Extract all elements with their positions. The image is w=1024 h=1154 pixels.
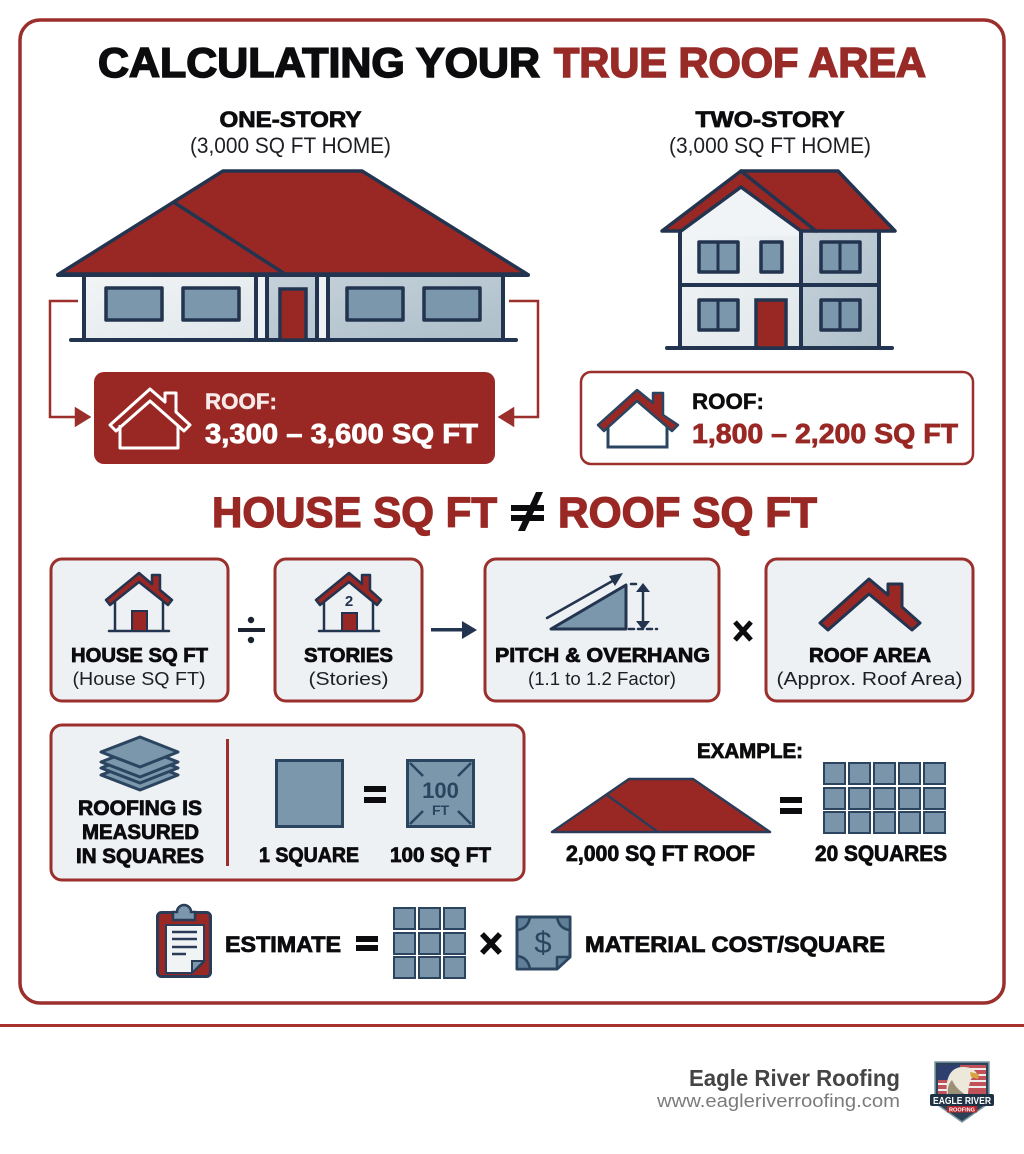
callout: one-story roof area: 3,300 – 3,600 SQ FT bbox=[205, 418, 478, 449]
panel: measured in squares bbox=[51, 725, 524, 880]
title bbox=[98, 39, 926, 86]
one-story heading: (3,000 SQ FT HOME) bbox=[190, 133, 391, 158]
icon: roof bbox=[820, 579, 920, 630]
panel: measured in squares: 1 SQUARE bbox=[259, 844, 359, 867]
title: CALCULATING YOUR bbox=[98, 39, 540, 86]
icon: two-story house: 2 bbox=[345, 593, 353, 610]
callout: two-story roof area: 1,800 – 2,200 SQ FT bbox=[692, 418, 958, 449]
one-story house illustration bbox=[58, 171, 528, 340]
panel: two-story bbox=[581, 107, 973, 464]
icon: clipboard bbox=[158, 905, 210, 976]
panel: example: EXAMPLE: bbox=[697, 740, 803, 763]
roofing is measured text: MEASURED bbox=[82, 821, 199, 844]
panel: example: 2,000 SQ FT ROOF bbox=[566, 841, 755, 866]
icon: example roof bbox=[552, 779, 770, 832]
footer rule bbox=[0, 1024, 1024, 1027]
two-story house illustration bbox=[662, 171, 895, 348]
panel: estimate formula bbox=[158, 905, 885, 978]
panel: roof area: (Approx. Roof Area) bbox=[776, 669, 962, 689]
operator: multiply bbox=[735, 622, 751, 640]
operator: divide bbox=[238, 617, 265, 643]
panel: estimate formula: ESTIMATE bbox=[225, 932, 341, 957]
icon: pitch triangle bbox=[547, 573, 657, 630]
icon: 100 ft square bbox=[408, 760, 474, 826]
panel: stories bbox=[275, 559, 422, 701]
callout: one-story roof area: ROOF: bbox=[205, 389, 277, 414]
panel: pitch and overhang: PITCH & OVERHANG bbox=[495, 645, 710, 667]
arrow: to pitch bbox=[431, 621, 477, 639]
heading: house sq ft not equal roof sq ft bbox=[212, 489, 817, 537]
panel: estimate formula: MATERIAL COST/SQUARE bbox=[585, 932, 885, 957]
grid: nine squares bbox=[394, 908, 465, 978]
footer: brand name and url: www.eagleriverroofing.com bbox=[656, 1090, 900, 1111]
one-story heading: ONE-STORY bbox=[220, 107, 362, 132]
panel: stories: (Stories) bbox=[308, 669, 388, 689]
callout: two-story roof area: ROOF: bbox=[692, 389, 764, 414]
footer: brand name and url bbox=[656, 1065, 900, 1111]
icon: one square bbox=[276, 760, 342, 826]
equals bbox=[364, 786, 386, 803]
icon: stacked shingles bbox=[101, 737, 178, 790]
panel: one-story bbox=[50, 107, 538, 464]
grid: twenty squares bbox=[824, 763, 945, 833]
title: TRUE ROOF AREA bbox=[554, 39, 926, 86]
panel: house sq ft: (House SQ FT) bbox=[72, 669, 206, 689]
two-story heading: (3,000 SQ FT HOME) bbox=[669, 133, 871, 158]
panel: house sq ft: HOUSE SQ FT bbox=[71, 645, 208, 667]
roofing is measured text: IN SQUARES bbox=[76, 845, 204, 868]
panel: example bbox=[552, 740, 947, 866]
panel: pitch and overhang: (1.1 to 1.2 Factor) bbox=[528, 669, 676, 689]
panel: measured in squares: 100 SQ FT bbox=[390, 844, 491, 867]
footer: logo badge: EAGLE RIVER bbox=[933, 1095, 991, 1107]
icon: two-story house bbox=[316, 573, 381, 631]
callout: one-story roof area bbox=[94, 372, 495, 464]
panel: roof area bbox=[766, 559, 973, 701]
icon: dollar note bbox=[517, 917, 570, 969]
two-story heading bbox=[669, 107, 871, 158]
two-story heading: TWO-STORY bbox=[696, 107, 845, 132]
icon: white house outline bbox=[110, 389, 190, 448]
equals bbox=[356, 936, 378, 951]
heading: house sq ft not equal roof sq ft: HOUSE SQ FT bbox=[212, 489, 497, 537]
icon: 100 ft square: FT bbox=[432, 802, 449, 818]
heading: house sq ft not equal roof sq ft: ROOF SQ FT bbox=[558, 489, 817, 537]
footer: brand name and url: Eagle River Roofing bbox=[689, 1065, 900, 1091]
footer: logo badge bbox=[930, 1062, 994, 1122]
panel: stories: STORIES bbox=[304, 645, 393, 667]
equals bbox=[780, 797, 802, 814]
footer: logo badge: ROOFING bbox=[949, 1108, 975, 1114]
panel: house sq ft bbox=[51, 559, 228, 701]
panel: roof area: ROOF AREA bbox=[809, 645, 931, 667]
panel: pitch and overhang bbox=[485, 559, 719, 701]
icon: house bbox=[106, 573, 172, 631]
arrow: right bracket bbox=[500, 301, 538, 425]
one-story heading bbox=[190, 107, 391, 158]
roofing is measured text: ROOFING IS bbox=[78, 797, 202, 820]
callout: two-story roof area bbox=[581, 372, 973, 464]
roofing is measured text bbox=[76, 797, 204, 868]
icon: dollar note: $ bbox=[534, 925, 552, 960]
arrow: left bracket bbox=[50, 301, 89, 425]
icon: house with red roof bbox=[598, 390, 678, 447]
icon: 100 ft square: 100 bbox=[422, 778, 459, 803]
panel: example: 20 SQUARES bbox=[815, 841, 947, 866]
operator: multiply bbox=[482, 934, 500, 953]
